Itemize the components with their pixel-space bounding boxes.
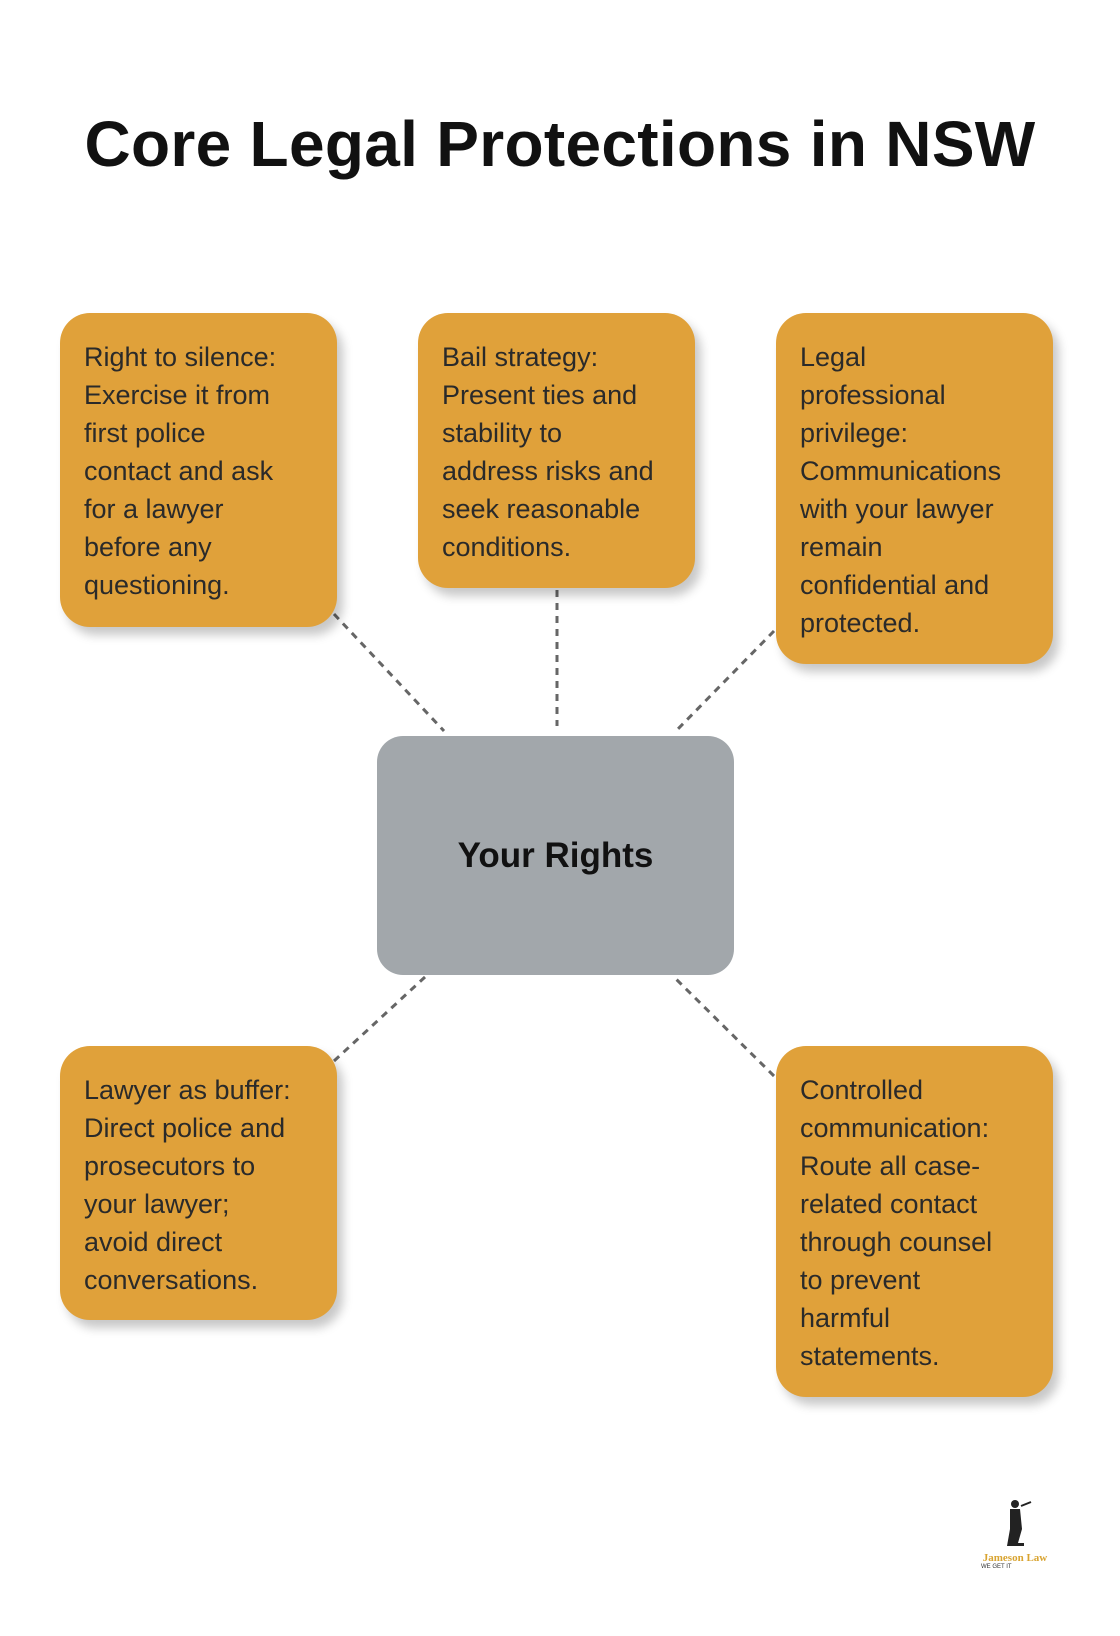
panel: right to silence: before any: [84, 532, 212, 562]
panel: bail strategy: seek reasonable: [442, 494, 640, 524]
center: your rights: [377, 736, 734, 975]
panel: bail strategy: Bail strategy:: [442, 342, 598, 372]
panel: controlled communication: Route all case-: [800, 1151, 980, 1181]
panel: controlled communication: related contact: [800, 1189, 977, 1219]
panel: controlled communication: communication:: [800, 1113, 989, 1143]
panel: legal professional privilege: [776, 313, 1053, 664]
panel: bail strategy: stability to: [442, 418, 562, 448]
panel: legal professional privilege: Legal: [800, 342, 866, 372]
panel: lawyer as buffer: avoid direct: [84, 1227, 222, 1257]
logo: [981, 1500, 1048, 1570]
panel: right to silence: questioning.: [84, 570, 230, 600]
panel: legal professional privilege: protected.: [800, 608, 920, 638]
logo: Jameson Law: [983, 1552, 1047, 1564]
panel: lawyer as buffer: conversations.: [84, 1265, 258, 1295]
panel: lawyer as buffer: prosecutors to: [84, 1151, 255, 1181]
panel: bail strategy: conditions.: [442, 532, 571, 562]
panel: right to silence: first police: [84, 418, 206, 448]
panel: bail strategy: Present ties and: [442, 380, 637, 410]
center: your rights: Your Rights: [458, 836, 653, 874]
panel: controlled communication: harmful: [800, 1303, 890, 1333]
panel: controlled communication: through counsel: [800, 1227, 992, 1257]
panel: controlled communication: [776, 1046, 1053, 1397]
title: Core Legal Protections in NSW: [84, 108, 1036, 180]
panel: lawyer as buffer: [60, 1046, 337, 1320]
panel: controlled communication: Controlled: [800, 1075, 923, 1105]
logo: WE GET IT: [981, 1564, 1012, 1570]
panel: controlled communication: statements.: [800, 1341, 940, 1371]
panel: right to silence: for a lawyer: [84, 494, 224, 524]
panel: right to silence: contact and ask: [84, 456, 273, 486]
panel: bail strategy: [418, 313, 695, 588]
panel: legal professional privilege: remain: [800, 532, 883, 562]
panel: lawyer as buffer: Lawyer as buffer:: [84, 1075, 291, 1105]
panel: legal professional privilege: privilege:: [800, 418, 908, 448]
panel: bail strategy: address risks and: [442, 456, 654, 486]
panel: controlled communication: to prevent: [800, 1265, 920, 1295]
panel: lawyer as buffer: your lawyer;: [84, 1189, 230, 1219]
panel: legal professional privilege: professional: [800, 380, 946, 410]
panel: legal professional privilege: confidential and: [800, 570, 989, 600]
panel: right to silence: Exercise it from: [84, 380, 270, 410]
panel: right to silence: Right to silence:: [84, 342, 276, 372]
panel: legal professional privilege: Communications: [800, 456, 1001, 486]
panel: lawyer as buffer: Direct police and: [84, 1113, 285, 1143]
panel: legal professional privilege: with your lawyer: [800, 494, 994, 524]
panel: right to silence: [60, 313, 337, 627]
